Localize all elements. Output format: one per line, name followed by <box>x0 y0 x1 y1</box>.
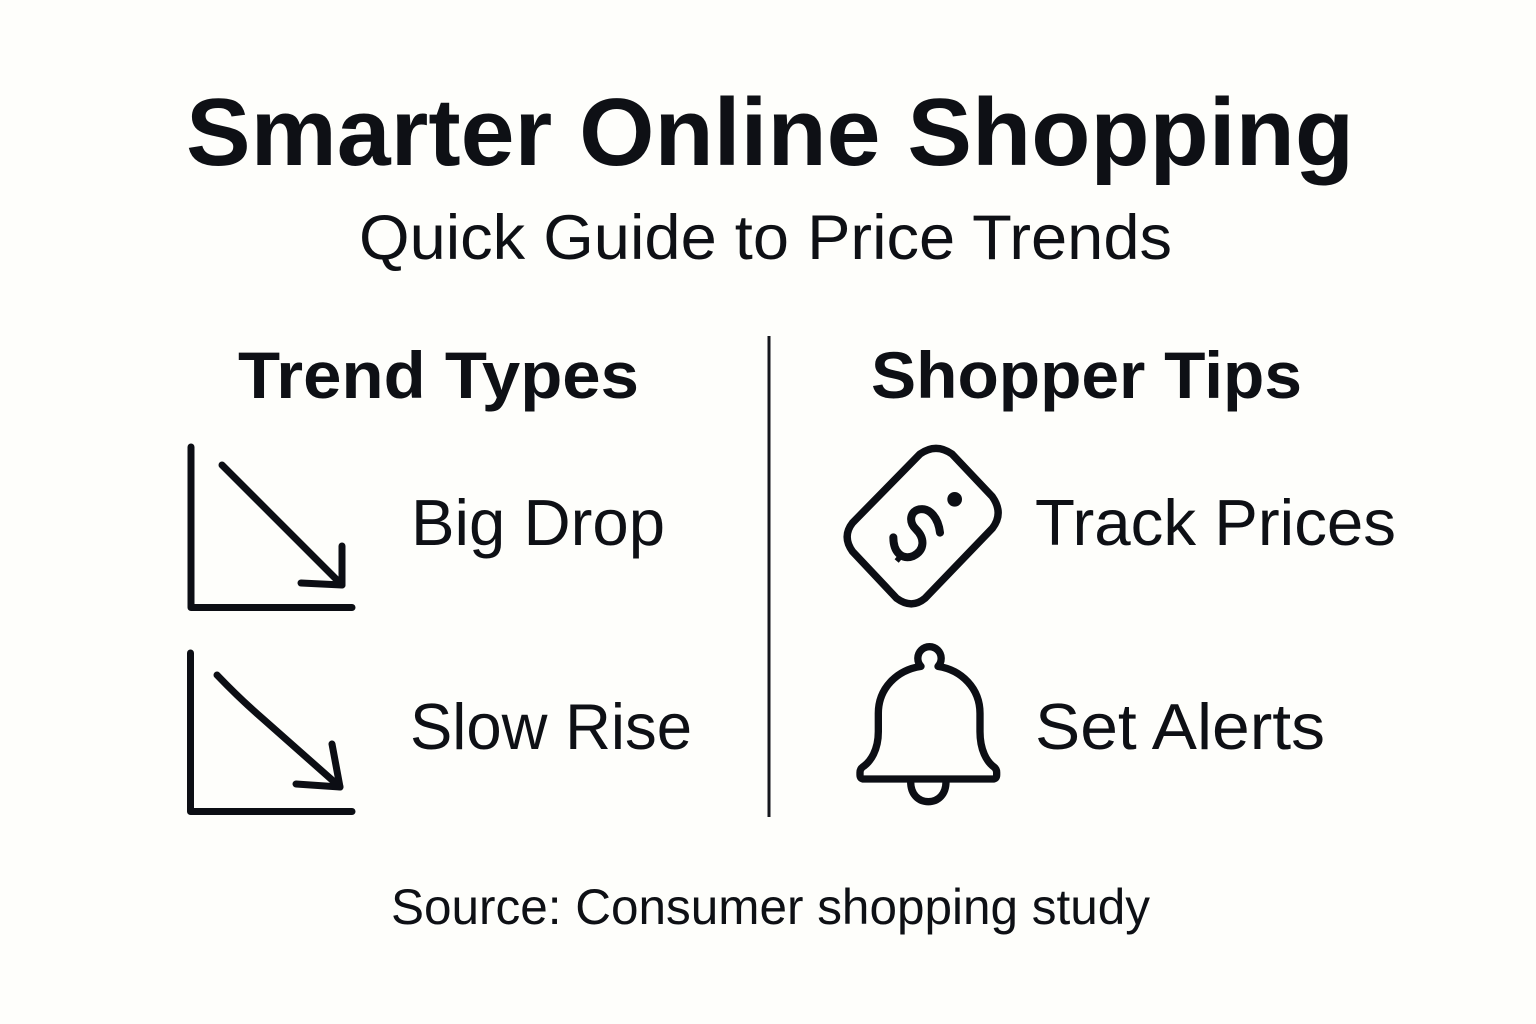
icon: big drop chart <box>191 447 352 608</box>
source note: Source: Consumer shopping study <box>391 879 1150 935</box>
icon: bell <box>860 647 997 802</box>
heading: trend types: Trend Types <box>238 338 639 412</box>
divider <box>768 336 770 817</box>
icon: price tag <box>847 448 998 604</box>
subtitle: Quick Guide to Price Trends <box>359 203 1172 273</box>
label: set alerts: Set Alerts <box>1035 690 1325 763</box>
panel: shopper tips <box>847 338 1396 802</box>
label: track prices: Track Prices <box>1035 486 1396 559</box>
label: slow rise: Slow Rise <box>410 690 692 763</box>
heading: shopper tips: Shopper Tips <box>871 338 1302 412</box>
label: big drop: Big Drop <box>411 486 665 559</box>
icon: slow rise chart <box>190 653 352 812</box>
title: Smarter Online Shopping <box>186 79 1354 186</box>
panel: trend types <box>190 338 692 812</box>
